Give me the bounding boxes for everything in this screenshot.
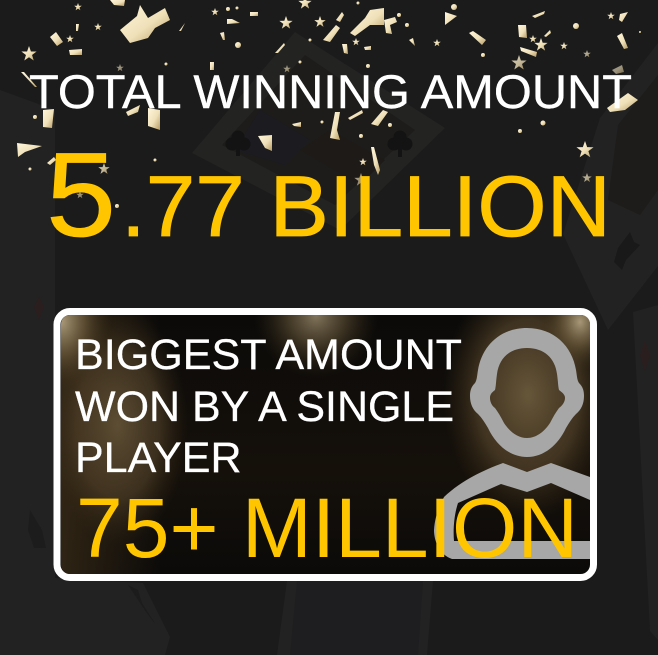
panel: biggest single win	[54, 308, 597, 581]
text: biggest amount won by a single player: WON BY A SINGLE	[75, 383, 454, 431]
spotlight glows	[61, 315, 590, 574]
headline figure: 5.77 billion: 5	[46, 128, 116, 262]
figure: 75+ million: 75+ MILLION	[76, 481, 578, 575]
text: biggest amount won by a single player: PLAYER	[75, 434, 242, 482]
text: biggest amount won by a single player: BIGGEST AMOUNT	[75, 331, 462, 379]
icon: player silhouette	[434, 328, 590, 559]
text: biggest amount won by a single player	[75, 331, 462, 482]
headline figure: 5.77 billion	[46, 128, 611, 262]
confetti and stars	[17, 0, 641, 208]
title: total winning amount: TOTAL WINNING AMOUNT	[29, 66, 632, 119]
headline figure: 5.77 billion: .77 BILLION	[121, 159, 611, 255]
